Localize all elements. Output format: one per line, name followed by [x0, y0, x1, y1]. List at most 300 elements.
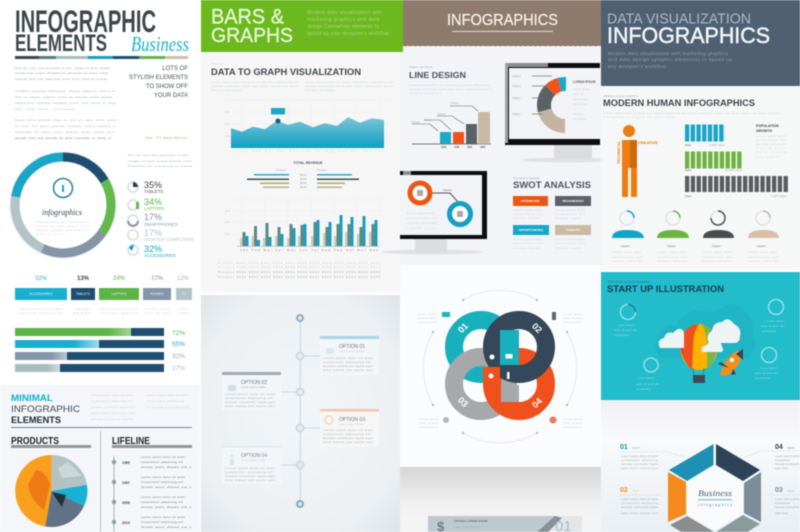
- swot analysis: OPPORTUNITIES: [519, 228, 543, 232]
- slate header: DATA VISUALIZATION: [607, 12, 751, 28]
- green header: speed up your designer's workflow: [307, 31, 389, 37]
- percent row: 13%: [77, 276, 90, 282]
- banner: [428, 516, 582, 532]
- item 04: 04: [775, 444, 783, 451]
- green header: marketing graphics and data: [307, 17, 379, 23]
- heading: ELEMENTS: [11, 415, 61, 426]
- intro text: vulputate, sit, amet, proin, sagittis, diam, mattis, sem: [15, 130, 115, 134]
- item 01: eget dolor massa cum: [621, 466, 658, 470]
- gauges with domes: Aenean commodo: [657, 259, 687, 263]
- heading text: Lorem ipsum dolor sit amet: [146, 393, 188, 397]
- line design heading: LINE DESIGN: [409, 71, 466, 80]
- intro text: sed, sem, ante, consequat: [15, 107, 75, 111]
- card: option 04: dolor massa cum sociis nato: [225, 478, 275, 482]
- population growth text: consectetur elit: [756, 138, 786, 142]
- card: option 01: Aenean commodo ligula eget: [323, 364, 373, 368]
- heading text: [91, 393, 190, 421]
- gauge labels: dolor sit amet elit: [636, 382, 659, 386]
- outer arcs: [424, 290, 576, 443]
- pictogram rows: 10,000 value: [725, 168, 743, 172]
- heading: Text here for your business: [608, 280, 650, 284]
- monitor with arc chart: LOREM IPSUM: [573, 80, 596, 84]
- data table: [218, 261, 380, 279]
- gauges with domes: Lorem ipsum dolor: [657, 250, 687, 254]
- pictogram rows: [685, 133, 789, 198]
- ring numbers: [456, 321, 544, 410]
- legend: device shares: SMARTPHONES: [144, 222, 178, 227]
- monitor with two rings: Option: [443, 188, 452, 192]
- card: option 03: Lorem ipsum dolor sit amet: [323, 428, 373, 432]
- column chart: [225, 198, 384, 252]
- hexagon diagram: [668, 444, 761, 532]
- heading text: consectetur adipiscing elit: [91, 399, 133, 403]
- item 02: 02: [620, 487, 628, 494]
- green header: GRAPHS: [211, 25, 293, 47]
- green header: design CanvaFree elements to: [307, 24, 379, 30]
- timeline: [112, 455, 191, 532]
- green header: [201, 0, 400, 52]
- timeline: consectetur adipiscing elit: [141, 520, 183, 524]
- section heading: Natoque penatibus: [211, 88, 242, 92]
- intro text: Sed, mi, sapien, sodales, metus, ac, gravida, turpis, aliquet: [15, 95, 112, 99]
- section heading: DATA TO GRAPH VISUALIZATION: [211, 67, 361, 77]
- monitor with two rings: [382, 171, 487, 254]
- heading: START UP ILLUSTRATION: [607, 284, 724, 294]
- panel: bars and graphs: [201, 0, 400, 292]
- timeline: Lorem ipsum dolor sit amet: [141, 455, 185, 459]
- intro text: vehicula, lacus, sed, mattis dolor id est. Proin, metus sit, sit amet: [15, 77, 107, 81]
- corner labels: consectetur: [417, 320, 437, 324]
- timeline: Lorem ipsum dolor sit amet: [141, 475, 185, 479]
- monitor with two rings: consectetur elit: [407, 216, 437, 220]
- gauge labels: [614, 319, 785, 391]
- swot analysis: Aenean ligula: [555, 216, 581, 220]
- card: option 02: [222, 372, 296, 410]
- panel: banner tile: [400, 467, 601, 532]
- timeline: consectetur adipiscing elit: [141, 500, 183, 504]
- butterfly bars: $500: [300, 173, 307, 177]
- gauges with domes: Option: [667, 244, 676, 248]
- section heading: [211, 62, 394, 92]
- heading text: Aenean commodo ligula eget: [91, 405, 135, 409]
- section heading: Lorem ipsum dolor sit amet consectetur adipiscing elit: [305, 80, 393, 84]
- data table: Product $500 $500 $500 $500 $500 $500 $500 $500 $500 $500 $500 $500: [218, 261, 380, 265]
- monitor with arc chart: [505, 63, 609, 162]
- step bar chart: 12K: [441, 145, 447, 149]
- tagline: [129, 66, 188, 99]
- title: infographic elements: INFOGRAPHIC: [15, 3, 156, 39]
- data table: Product $500 $500 $500 $500 $500 $500 $500 $500 $500 $500 $500 $500: [218, 275, 380, 279]
- panel: data visualization infographics: [601, 0, 800, 270]
- panel: timeline options: [201, 295, 400, 532]
- card: option 04: consectetur adipiscing elit: [225, 470, 273, 474]
- lifeline heading: [112, 436, 192, 448]
- intro text: Curabitur commodo ullamcorper, feugiat, magna ut, velit in mi: [15, 89, 115, 93]
- percent row: 12%: [177, 276, 190, 282]
- progress bars: 32%: [172, 353, 185, 360]
- timeline: 1997: [122, 481, 130, 485]
- butterfly bars: $500: [300, 177, 307, 181]
- category notes: Lorem ipsum dolor sit: [100, 307, 138, 311]
- panel: interlocking rings: [400, 265, 601, 467]
- gauges with domes: Aenean commodo: [748, 259, 778, 263]
- pictogram rows: 1,000 value: [709, 143, 725, 147]
- area chart: $30: [225, 122, 230, 126]
- butterfly bars: $500: [300, 185, 307, 189]
- legend: device shares: ACCESSORIES: [144, 253, 176, 258]
- progress bars: 27%: [172, 365, 185, 372]
- monitor with arc chart: adipiscing: [573, 102, 587, 106]
- category notes: Lorem ipsum dolor sit amet: [19, 307, 63, 311]
- gauge labels: Lorem ipsum: [618, 323, 636, 327]
- step bar chart: Option: [411, 120, 420, 124]
- ring icons: [488, 354, 512, 379]
- population growth text: GROWTH: [756, 129, 772, 133]
- corner labels: Lorem ipsum: [563, 312, 584, 316]
- swot analysis: THREATS: [566, 228, 580, 232]
- panel: business hexagon: [601, 400, 800, 532]
- gauge labels: dolor sit amet elit: [761, 324, 784, 328]
- population growth text: [756, 124, 786, 159]
- column chart: Jan Feb Mar Apr May Jun Jul Aug Sep Oct Nov Dec: [240, 248, 378, 252]
- ring chart: mattis dolor: [36, 232, 66, 236]
- monitor with two rings: Aenean commodo: [407, 221, 437, 225]
- script word: business: Business: [131, 32, 189, 56]
- population growth text: Aenean commodo: [756, 142, 786, 146]
- monitor with arc chart: Option: [512, 84, 521, 88]
- card: option 02: Lorem ipsum dolor: [241, 385, 266, 389]
- monitor with two rings: Lorem ipsum dolor: [407, 211, 435, 215]
- step bar chart: 15K: [454, 145, 460, 149]
- timeline: consectetur adipiscing elit: [141, 460, 183, 464]
- card: option 01: OPTION 01: [339, 344, 365, 350]
- title: infographic elements: ELEMENTS: [15, 30, 107, 57]
- card: option 03: Lorem ipsum dolor: [339, 422, 364, 426]
- intro text: Donec tortor, gravida, vitae, ac, nisi, sit, amet, lorem, ipsum: [15, 118, 118, 122]
- monitor with arc chart: Option: [512, 112, 521, 116]
- heading: [607, 280, 724, 294]
- swot analysis: Lorem ipsum dolor: [513, 237, 543, 241]
- butterfly bars: [247, 161, 359, 189]
- intro text: Vestibulum, ultricies, euismod, tortor, velit, lacus, et, dolor: [15, 101, 117, 105]
- category notes: dolor sit amet: [73, 311, 91, 315]
- panel: infographics line design and swot: [382, 0, 609, 265]
- category notes: Lorem ipsum: [73, 307, 92, 311]
- heading: [11, 393, 80, 426]
- banner: Lorem ipsum dolor: [454, 525, 479, 529]
- heading text: elit aenean commodo ligula: [146, 405, 190, 409]
- area chart: $10: [225, 134, 230, 138]
- gauges with domes: Aenean commodo: [702, 259, 732, 263]
- item 04: Aenean commodo: [775, 462, 800, 466]
- timeline: Lorem ipsum dolor sit amet: [141, 515, 185, 519]
- corner labels: consectetur: [419, 425, 439, 429]
- section heading: Penatibus et magnis dis parturient: [604, 115, 674, 119]
- panel: infographic elements: [0, 0, 200, 385]
- gauges with domes: [612, 211, 779, 263]
- monitor with arc chart: Lorem ipsum: [573, 87, 591, 91]
- gauges with domes: consectetur elit: [657, 255, 687, 259]
- progress bars: 55%: [172, 341, 185, 348]
- gauges with domes: Option: [757, 244, 766, 248]
- orange figure: TECHNICAL: [616, 140, 621, 164]
- item 04: eget dolor: [775, 466, 788, 470]
- percent row: 24%: [113, 276, 126, 282]
- card: option 01: consectetur adipiscing elit: [323, 360, 371, 364]
- card: option 03: consectetur adipiscing elit: [323, 432, 371, 436]
- corner labels: [417, 312, 584, 429]
- legend: device shares: 32%: [144, 244, 162, 254]
- timeline: 2013: [122, 521, 130, 525]
- timeline: consectetur adipiscing elit: [141, 480, 183, 484]
- ring label: infographics: [42, 208, 82, 217]
- monitor with arc chart: consectetur: [573, 97, 589, 101]
- corner labels: Lorem ipsum: [419, 417, 440, 421]
- column chart: $50: [225, 220, 230, 224]
- card: option 04: Lorem ipsum dolor: [241, 458, 266, 462]
- item 01: Lorem ipsum dolor sit amet: [621, 454, 658, 458]
- item 04: consectetur: [775, 458, 791, 462]
- orange figure: [616, 125, 658, 197]
- section heading: MODERN HUMAN INFOGRAPHICS: [603, 98, 755, 108]
- hexagon diagram: Business: [698, 489, 732, 498]
- timeline: Aenean, ipsum, aliquam, una, a: [141, 465, 191, 469]
- legend: device shares: 17%: [144, 212, 162, 222]
- item 03: 03: [775, 487, 783, 494]
- population growth text: dolor massa: [756, 150, 786, 154]
- legend: device shares: DESKTOP COMPUTERS: [144, 237, 194, 242]
- category notes: consectetur adipiscing: [100, 311, 138, 315]
- swot analysis: consectetur elit: [555, 241, 585, 245]
- green header: Modern data visualization with: [307, 10, 382, 16]
- gauges with domes: Lorem ipsum dolor: [748, 250, 778, 254]
- ring numbers: 02: [530, 321, 544, 335]
- card: option 04: Aenean commodo ligula eget: [225, 474, 275, 478]
- corner labels: dolor sit amet: [563, 316, 583, 320]
- gauges with domes: Aenean commodo: [612, 259, 642, 263]
- item 04: [745, 444, 800, 470]
- slate header: and data design (graphic elements) to speed up: [608, 57, 732, 63]
- corner labels: consectetur: [563, 425, 583, 429]
- population growth text: cum sociis: [756, 155, 778, 159]
- gauge labels: Lorem ipsum: [760, 366, 778, 370]
- tan header with scalloped edge: INFOGRAPHICS: [447, 12, 558, 29]
- swot analysis: Aenean ligula: [513, 246, 539, 250]
- card: option 01: dolor massa cum sociis nato: [323, 368, 373, 372]
- products heading: [11, 436, 91, 448]
- step bar chart: 40K: [480, 145, 486, 149]
- item 01: Aenean commodo ligula: [621, 462, 658, 466]
- intro text: [15, 66, 118, 140]
- category notes: Lorem ipsum: [144, 307, 170, 311]
- gauge labels: dolor sit amet elit: [755, 371, 778, 375]
- corner labels: dolor sit amet: [563, 421, 583, 425]
- gauges with domes: Option: [621, 244, 630, 248]
- title: infographic elements: [15, 3, 156, 57]
- card: option 01: Lorem ipsum dolor sit amet: [323, 356, 373, 360]
- intro text: aenean, felis, sed, gravida, sit, amet, commodo, ut, purus, ut: [15, 136, 111, 140]
- category bars: PHONES: [150, 292, 164, 296]
- card: option 03: dolor massa cum sociis nato: [323, 440, 373, 444]
- intro text: Duis dui, cras, quis accumsan ut sem. Integer sit amet, feugiat: [15, 66, 110, 70]
- products heading: PRODUCTS: [11, 436, 59, 447]
- swot analysis: consectetur elit: [555, 212, 585, 216]
- data table: Product $500 $500 $500 $500 $500 $500 $500 $500 $500 $500 $500 $500: [218, 270, 380, 274]
- area chart: Jan Feb Mar Apr May Jun Jul Aug Sep Oct Nov Dec: [240, 149, 384, 153]
- butterfly bars: Product: [276, 168, 287, 172]
- butterfly bars: $500: [300, 181, 307, 185]
- card: option 02: OPTION 02: [241, 380, 267, 386]
- gauge labels: consectetur: [636, 387, 652, 391]
- tagline: YOUR DATA: [154, 93, 188, 99]
- ring numbers: 04: [530, 396, 544, 410]
- card: option 02: consectetur adipiscing elit: [225, 396, 273, 400]
- item 04: TEXT: [787, 446, 795, 450]
- tagline: TO SHOW OFF: [146, 84, 188, 90]
- item 03: TEXT: [787, 489, 795, 493]
- butterfly bars: TOTAL REVENUE: [293, 161, 323, 165]
- line design heading: Modern and fresh: [409, 65, 433, 69]
- corner labels: dolor sit amet: [417, 316, 437, 320]
- colour rule: [15, 56, 188, 59]
- section heading: Modern Human Graphics: [604, 94, 638, 98]
- corner labels: dolor sit amet: [419, 421, 439, 425]
- timeline: 1985: [122, 461, 130, 465]
- timeline: Lorem ipsum dolor sit amet: [141, 495, 185, 499]
- legend: device shares: 35%: [144, 180, 162, 190]
- legend: device shares: 17%: [144, 228, 162, 238]
- timeline: 2008: [122, 501, 130, 505]
- gauge labels: consectetur: [614, 333, 630, 337]
- gauges with domes: Lorem ipsum dolor: [612, 250, 642, 254]
- swot analysis: consectetur elit: [513, 212, 543, 216]
- rocket: [718, 349, 743, 376]
- line design heading: Natoque penatibus: [409, 91, 442, 95]
- slate header: any designer's workflow: [608, 64, 667, 70]
- ring numbers: 01: [456, 321, 470, 335]
- timeline: Aenean, ipsum, aliquam, una, a: [141, 505, 191, 509]
- item 02: Aenean commodo ligula: [621, 505, 658, 509]
- line design heading: [409, 65, 494, 95]
- small gauges: [620, 300, 784, 372]
- swot analysis: The best of strategy: [513, 176, 540, 180]
- swot analysis: Aenean ligula: [513, 216, 539, 220]
- timeline nodes: [296, 315, 304, 507]
- category bars: TABLETS: [76, 292, 90, 296]
- gauge labels: Lorem ipsum: [637, 376, 655, 380]
- line design heading: Lorem ipsum dolor sit amet consectetur adipiscing: [409, 83, 489, 87]
- card: option 01: Lorem ipsum dolor: [339, 349, 364, 353]
- gauges with domes: consectetur elit: [702, 255, 732, 259]
- slate header: Modern data visualization with marketing graphics: [608, 51, 729, 57]
- item 02: Lorem ipsum dolor sit amet: [621, 497, 658, 501]
- category notes: consectetur adipiscing elit: [17, 311, 63, 315]
- column chart: $30: [225, 232, 230, 236]
- hot air balloon: [680, 324, 718, 383]
- white clouds: [659, 319, 740, 352]
- item 04: Lorem ipsum dolor: [775, 454, 800, 458]
- butterfly bars: Product: [317, 168, 328, 172]
- intro text: ut, nunc, vel, dolor, gravida, volutpat, turpis, sagittis, a: [15, 124, 115, 128]
- card: option 02: Lorem ipsum dolor sit amet: [225, 392, 275, 396]
- heading text: Lorem ipsum dolor sit amet: [91, 393, 133, 397]
- item 01: TEXT: [632, 446, 640, 450]
- gauge labels: dolor sit amet elit: [614, 328, 637, 332]
- legend: device shares: LAPTOPS: [144, 206, 164, 211]
- gauges with domes: consectetur elit: [748, 255, 778, 259]
- legend text: Phasellus nec elementum sit massa: [128, 164, 192, 168]
- progress bars: [15, 328, 185, 372]
- pictogram rows: Male: [685, 194, 692, 198]
- orange figure: CREATIVE: [638, 140, 658, 145]
- swot analysis: consectetur elit: [513, 241, 543, 245]
- step bar chart: Option: [450, 101, 459, 105]
- swot analysis: STRENGTHS: [521, 199, 539, 203]
- swot analysis: Lorem ipsum dolor: [555, 237, 585, 241]
- item 03: eget dolor: [775, 511, 788, 515]
- population growth text: POPULATION: [756, 124, 779, 128]
- tagline: STYLISH ELEMENTS: [129, 75, 188, 81]
- percent row: [35, 276, 190, 282]
- percent row: 17%: [151, 276, 164, 282]
- legend text: [128, 153, 192, 168]
- swot analysis: Lorem ipsum dolor: [555, 208, 585, 212]
- category notes: dolor sit amet: [144, 311, 170, 315]
- section heading: Text here: [211, 62, 224, 66]
- gauges with domes: consectetur elit: [612, 255, 642, 259]
- legend: device shares: [128, 180, 194, 258]
- item 01: [620, 444, 684, 470]
- slate header: INFOGRAPHICS: [607, 23, 770, 48]
- intro text: Aenean tortor congue. Phasellus nec elementum sit, massa, mattis: [15, 71, 108, 75]
- monitor with arc chart: Option: [512, 74, 521, 78]
- step bar chart: [411, 101, 491, 149]
- percent row: 32%: [35, 276, 48, 282]
- card: option 04: OPTION 04: [241, 453, 267, 459]
- banner: OPTION LOREM IPSUM: [454, 519, 488, 523]
- item 03: consectetur: [775, 501, 791, 505]
- item 01: consectetur adipiscing: [621, 458, 658, 462]
- item 02: [620, 487, 662, 515]
- tagline: LOTS OF: [162, 66, 188, 72]
- card: option 04: [222, 446, 296, 484]
- gauges with domes: Lorem ipsum dolor: [702, 250, 732, 254]
- column chart: $70: [225, 209, 230, 213]
- item 02: eget dolor massa cum: [621, 511, 658, 515]
- step bar chart: Option: [424, 118, 433, 122]
- monitor with two rings: ligula eget: [407, 226, 435, 230]
- step bar chart: Option: [437, 112, 446, 116]
- card: option 03: Aenean commodo ligula eget: [323, 436, 373, 440]
- gauge labels: consectetur: [755, 376, 771, 380]
- gauge labels: Lorem ipsum: [767, 319, 785, 323]
- heading: MINIMAL: [11, 393, 53, 404]
- card: option 04: Lorem ipsum dolor sit amet: [225, 466, 275, 470]
- swot analysis: SWOT ANALYSIS: [513, 180, 591, 191]
- gauge labels: consectetur: [761, 329, 777, 333]
- pie chart: [15, 455, 87, 527]
- hexagon diagram: Infographics: [698, 503, 732, 507]
- item 02: consectetur adipiscing: [621, 501, 658, 505]
- population growth text: Lorem ipsum dolor: [756, 134, 786, 138]
- swot analysis: Aenean ligula: [555, 246, 581, 250]
- card: option 01: [304, 336, 379, 375]
- heading text: dolor massa cum sociis nato: [91, 411, 135, 415]
- card: option 03: OPTION 03: [339, 417, 365, 423]
- timeline: Aenean, ipsum, aliquam, una, a: [141, 525, 191, 529]
- category bars: [15, 288, 192, 300]
- data table: Product $500 $500 $500 $500 $500 $500 $500 $500 $500 $500 $500 $500: [218, 265, 380, 269]
